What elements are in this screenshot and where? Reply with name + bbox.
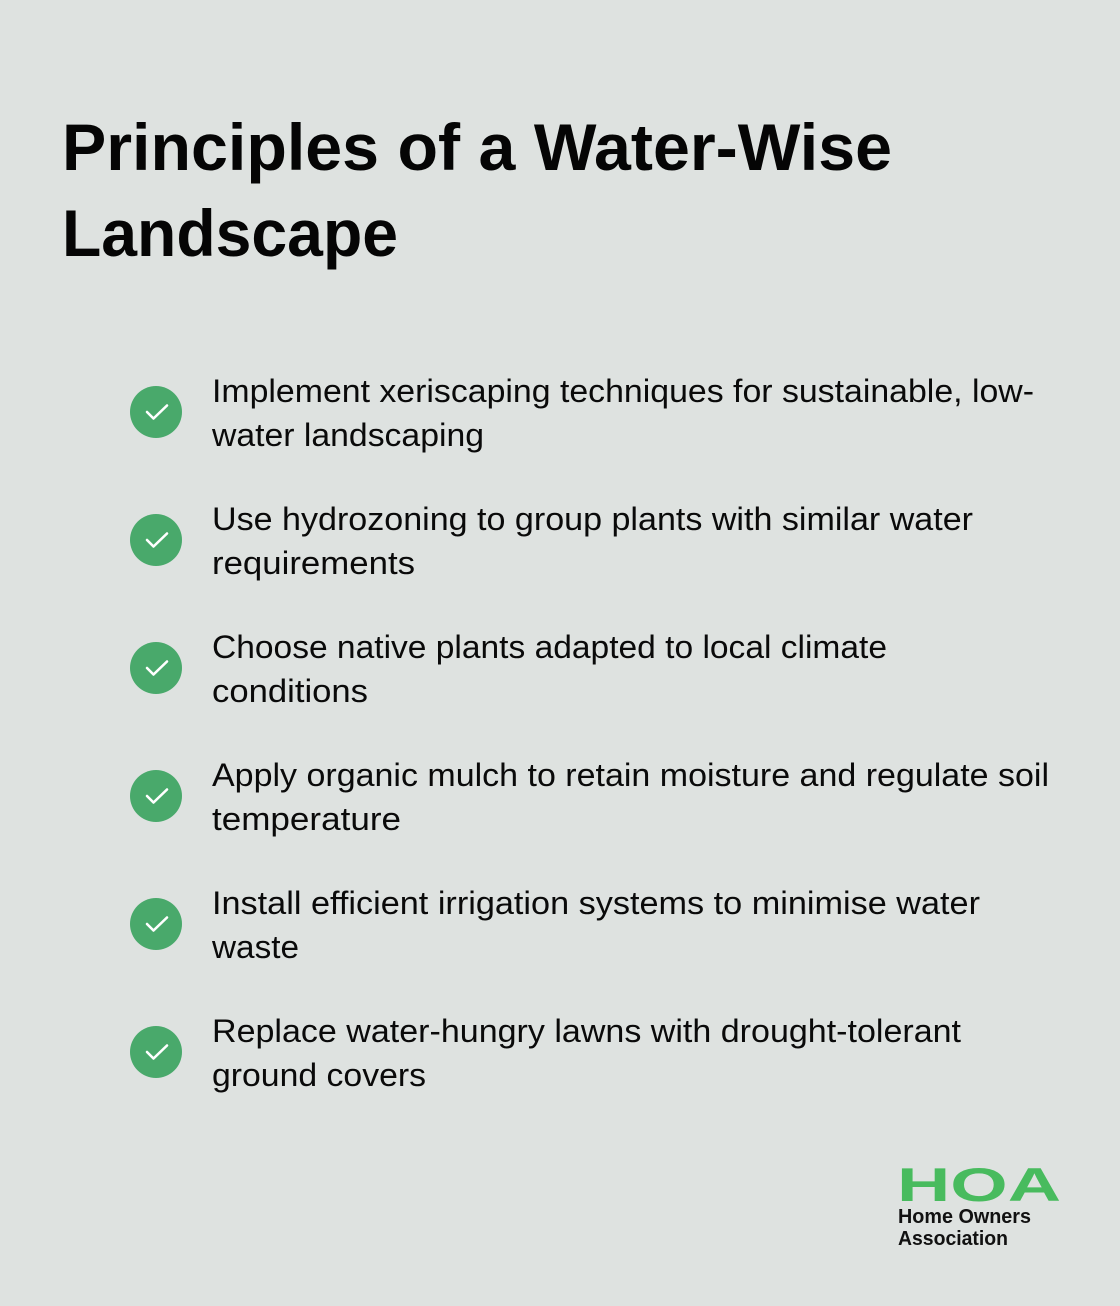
item text: xeriscaping: Implement xeriscaping techniques for sustainable, low-: [212, 373, 1034, 409]
item text: hydrozoning: [212, 501, 973, 581]
item text: xeriscaping: [211, 373, 1034, 453]
checklist: [130, 373, 1049, 1093]
item text: native plants: Choose native plants adapted to local climate: [212, 629, 887, 665]
item text: native plants: conditions: [212, 673, 368, 709]
item text: ground covers: Replace water-hungry lawns with drought-tolerant: [212, 1013, 961, 1049]
item: hydrozoning: [130, 501, 973, 581]
item: mulch: [130, 757, 1049, 837]
item text: ground covers: ground covers: [212, 1057, 426, 1093]
item: irrigation: [130, 885, 980, 965]
item text: irrigation: Install efficient irrigation systems to minimise water: [212, 885, 980, 921]
logo: HOA Home Owners Association: HOA: [897, 1158, 1061, 1211]
item: ground covers: [130, 1013, 961, 1093]
item: xeriscaping: [130, 373, 1034, 453]
item text: hydrozoning: requirements: [212, 545, 415, 581]
item text: mulch: temperature: [212, 801, 401, 837]
icon: check: [130, 1026, 182, 1078]
icon: check: [130, 386, 182, 438]
item text: mulch: [212, 757, 1049, 837]
item: native plants: [130, 629, 887, 709]
title: [62, 110, 892, 270]
item text: xeriscaping: water landscaping: [211, 417, 484, 453]
item text: native plants: [212, 629, 887, 709]
logo: HOA Home Owners Association: [897, 1158, 1061, 1250]
item text: hydrozoning: Use hydrozoning to group plants with similar water: [212, 501, 973, 537]
item text: irrigation: waste: [211, 929, 299, 965]
title: Landscape: [62, 196, 398, 270]
item text: mulch: Apply organic mulch to retain moisture and regulate soil: [212, 757, 1049, 793]
logo: HOA Home Owners Association: Home Owners: [898, 1206, 1031, 1228]
item text: irrigation: [211, 885, 980, 965]
icon: check: [130, 898, 182, 950]
item text: ground covers: [212, 1013, 961, 1093]
icon: check: [130, 770, 182, 822]
logo: HOA Home Owners Association: Association: [898, 1228, 1008, 1250]
icon: check: [130, 642, 182, 694]
icon: check: [130, 514, 182, 566]
title: Principles of a Water-Wise: [62, 110, 892, 184]
